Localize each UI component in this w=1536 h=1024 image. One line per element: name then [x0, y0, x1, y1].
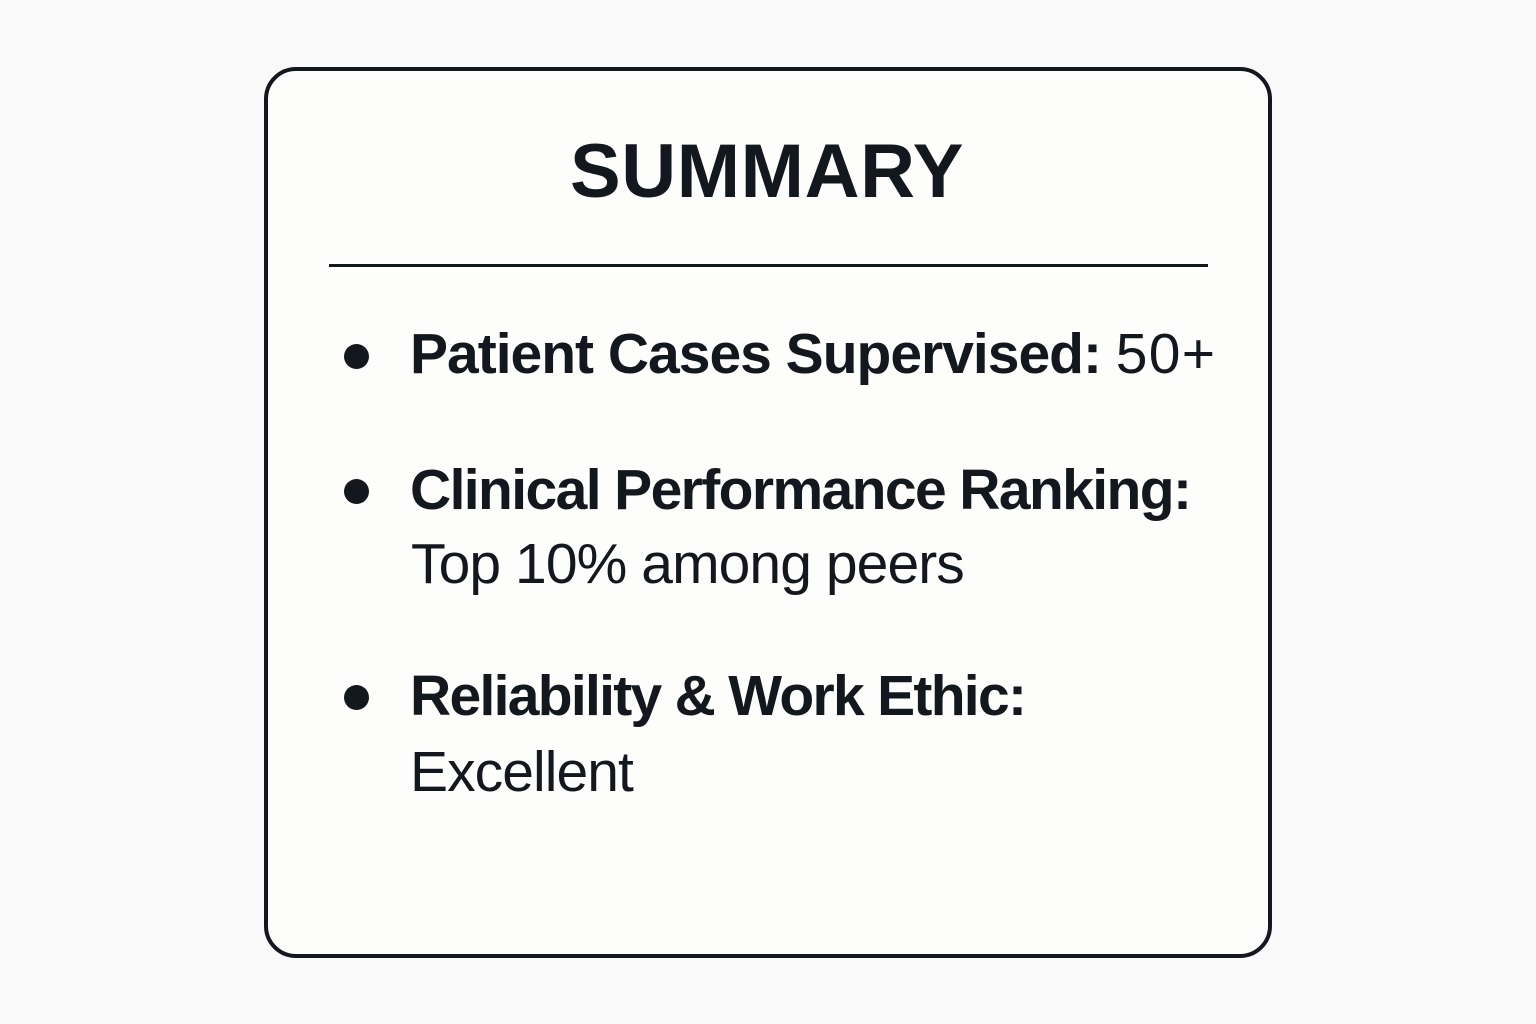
text: clinical performance ranking: Clinical Performance Ranking:: [410, 458, 1190, 522]
bullet icon: clinical performance: [344, 479, 369, 504]
text: patient cases supervised: Patient Cases Supervised: 50+: [410, 322, 1216, 386]
text: reliability and work ethic: Reliability & Work Ethic:: [410, 664, 1025, 728]
panel: summary card: [264, 67, 1272, 958]
title: SUMMARY: [570, 129, 964, 214]
text: top 10% among peers: Top 10% among peers: [411, 532, 964, 596]
bullet icon: reliability: [344, 685, 369, 710]
bullet icon: patient cases: [344, 344, 369, 369]
text: excellent: Excellent: [410, 740, 633, 804]
